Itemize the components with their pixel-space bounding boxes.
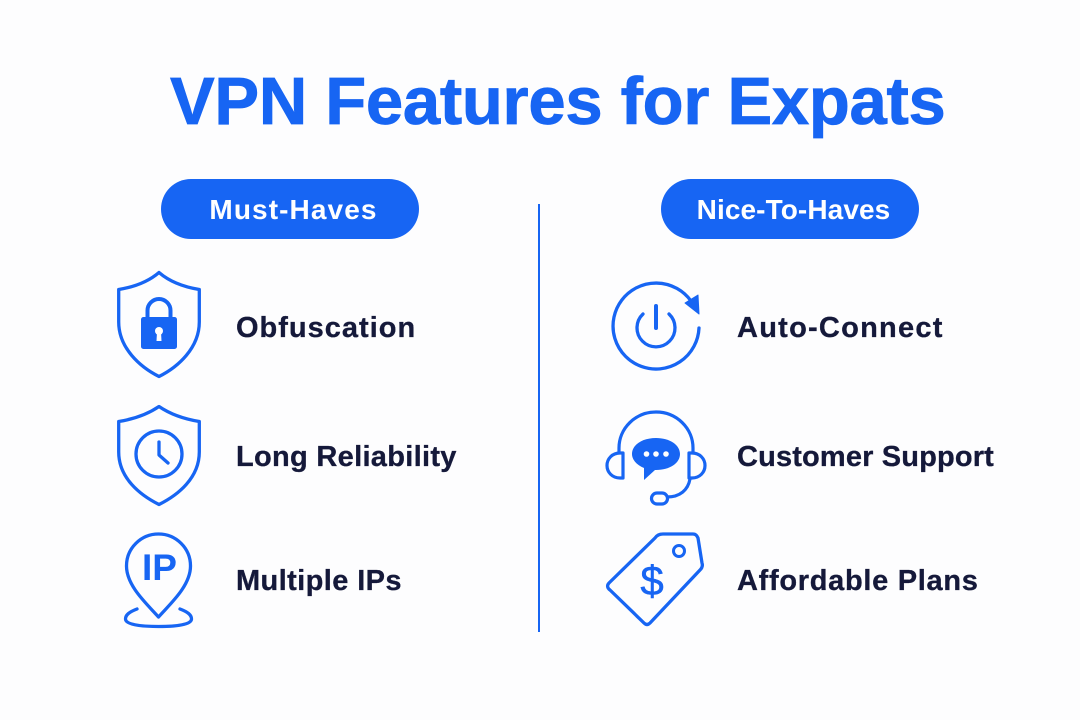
heading: must-haves: Must-Haves — [209, 194, 378, 225]
heading: nice-to-haves — [661, 179, 919, 239]
title: VPN Features for Expats — [170, 64, 945, 139]
icon: shield with padlock — [117, 270, 201, 378]
icon: price tag with dollar — [606, 532, 704, 626]
column divider — [538, 204, 540, 632]
icon: headset with chat bubble — [605, 410, 707, 506]
icon: IP location pin: IP — [142, 547, 177, 588]
icon: power with circular arrow — [611, 281, 701, 371]
icon: shield with clock — [117, 404, 201, 506]
label: customer support: Customer Support — [737, 441, 994, 473]
icon: price tag with dollar: $ — [640, 557, 664, 604]
label: obfuscation: Obfuscation — [236, 312, 416, 344]
label: affordable plans: Affordable Plans — [737, 565, 979, 597]
heading: must-haves — [161, 179, 419, 239]
label: multiple IPs: Multiple IPs — [236, 565, 402, 597]
icon: IP location pin — [124, 532, 194, 628]
label: long reliability: Long Reliability — [236, 441, 457, 473]
label: auto-connect: Auto-Connect — [737, 312, 944, 344]
heading: nice-to-haves: Nice-To-Haves — [697, 194, 890, 225]
